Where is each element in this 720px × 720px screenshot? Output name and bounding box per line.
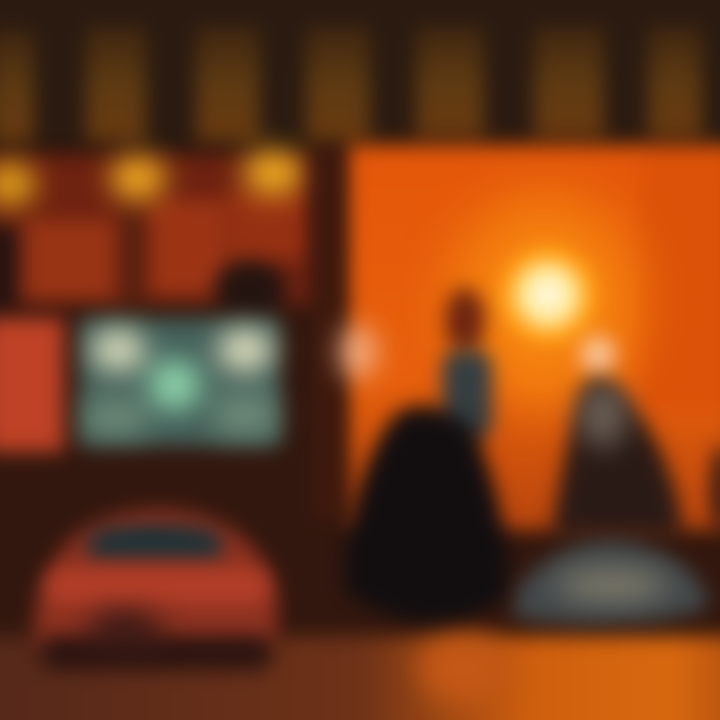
car windscreen: [86, 525, 222, 558]
far right figure edge: [710, 445, 720, 535]
car lights band: [45, 568, 270, 604]
ceiling with vertical stripes: [0, 0, 720, 150]
screen lights: [85, 328, 275, 435]
screen: [80, 318, 280, 446]
car: [35, 510, 278, 670]
orange wall panel: [348, 145, 720, 530]
ceiling lights: [0, 150, 303, 206]
wall glow around lamp: [450, 195, 640, 405]
central figure: [344, 288, 508, 622]
pillar: [312, 150, 340, 520]
red-brown upper left wall: [0, 155, 315, 316]
seated base: [512, 541, 708, 624]
lamp light: [482, 229, 614, 361]
right figure: [512, 379, 708, 624]
floor: [0, 636, 720, 720]
small light above right figure: [580, 335, 616, 375]
car lower body: [40, 636, 272, 670]
red left panel: [0, 318, 64, 452]
small wall light: [340, 326, 376, 378]
car grille: [87, 610, 163, 650]
floor reflection: [418, 632, 506, 704]
